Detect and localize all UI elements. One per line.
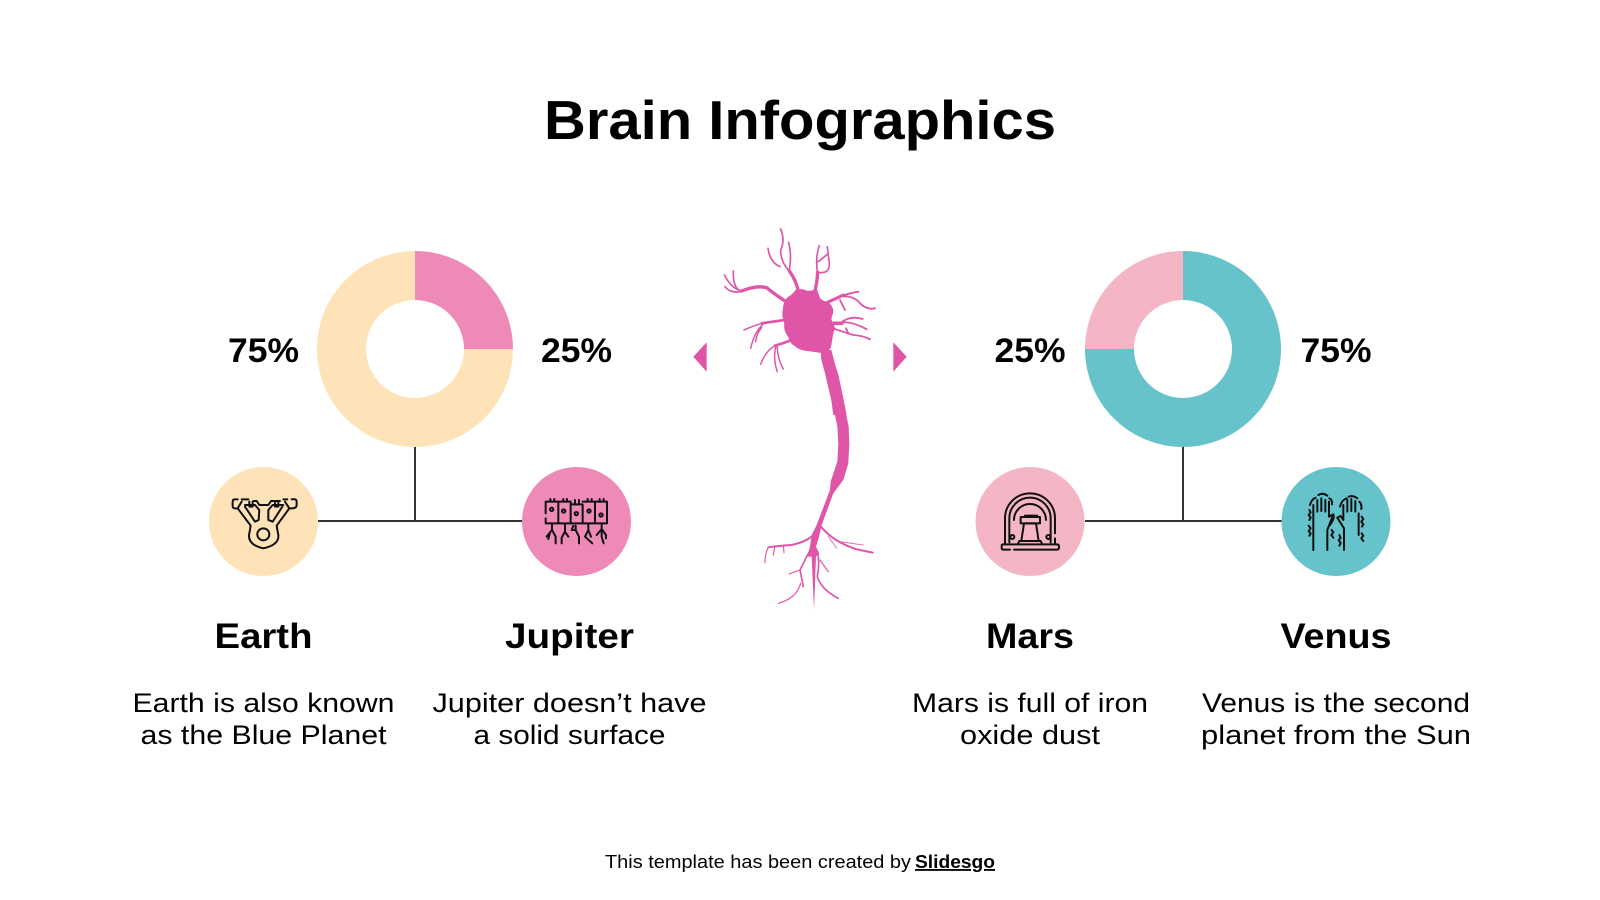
footer credit: This template has been created by <box>605 851 912 872</box>
label: Venus <box>1201 617 1471 750</box>
arrow: right <box>893 342 907 372</box>
icon circle: Jupiter <box>522 467 631 576</box>
label: Earth: Earth <box>214 617 312 656</box>
label: Mars: Mars is full of iron <box>912 688 1148 718</box>
label: Jupiter: Jupiter doesn’t have <box>432 688 706 718</box>
donut chart: Earth and Jupiter <box>317 251 513 447</box>
label: Earth: as the Blue Planet <box>140 720 387 750</box>
icon circle: Mars <box>976 467 1084 576</box>
label: Mars <box>912 617 1148 750</box>
panel: left donut group <box>132 251 706 750</box>
label: Earth: Earth is also known <box>132 688 394 718</box>
icon circle: Venus <box>1282 467 1390 576</box>
icon circle: Earth <box>209 467 318 576</box>
label: Venus: planet from the Sun <box>1201 720 1471 750</box>
label: Jupiter <box>432 617 706 750</box>
panel: right donut group <box>912 251 1471 750</box>
label: Mars: Mars <box>986 617 1074 656</box>
label: Jupiter: Jupiter <box>505 617 634 656</box>
label: Venus: Venus <box>1280 617 1392 656</box>
percentage: Venus 75%: 75% <box>1300 332 1372 370</box>
label: Earth <box>132 617 394 750</box>
arrow: left <box>693 342 707 372</box>
label: Mars: oxide dust <box>960 720 1101 750</box>
label: Jupiter: a solid surface <box>474 720 666 750</box>
connector: left <box>318 447 522 521</box>
title: Brain Infographics <box>544 89 1056 151</box>
neuron illustration <box>724 229 875 610</box>
percentage: Jupiter 25%: 25% <box>541 332 612 370</box>
percentage: Mars 25%: 25% <box>994 332 1066 370</box>
connector: right <box>1085 447 1282 521</box>
footer credit: Slidesgo <box>915 851 995 872</box>
label: Venus: Venus is the second <box>1202 688 1470 718</box>
donut chart: Mars and Venus <box>1085 251 1281 447</box>
percentage: Earth 75%: 75% <box>228 332 299 370</box>
